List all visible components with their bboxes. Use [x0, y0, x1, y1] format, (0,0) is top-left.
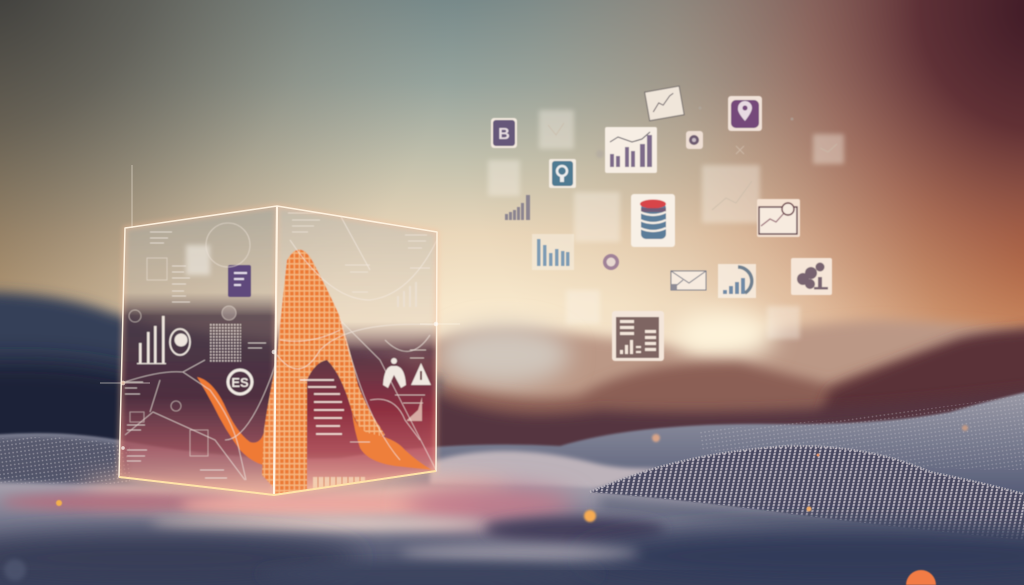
back band — [0, 388, 1024, 585]
people icon — [383, 358, 406, 388]
floating icons cluster — [488, 86, 844, 361]
icon: descending bar chart — [532, 234, 574, 270]
dot matrix — [209, 324, 241, 363]
icon: rising bars — [505, 195, 530, 220]
background: distant hills — [0, 292, 1024, 470]
small bar chart — [397, 282, 417, 307]
dotted rise at the seam — [262, 370, 274, 488]
blurred light tile — [186, 245, 210, 275]
icon: cloud and figure — [791, 258, 832, 295]
small text lines on left face — [125, 232, 266, 478]
icon: teal bulb — [549, 159, 576, 188]
panel: cube right face — [270, 206, 437, 495]
icon: dashboard card — [612, 311, 664, 361]
panel: cube left face — [119, 206, 280, 495]
orange wave — [197, 377, 272, 466]
cube glowing edges — [119, 206, 437, 495]
warning triangle icon — [411, 363, 431, 385]
circular badge: ES — [231, 375, 249, 390]
bar chart on left face — [137, 316, 166, 364]
icon: envelope — [671, 271, 706, 290]
line network — [277, 215, 437, 470]
orange ribbon — [352, 412, 432, 470]
faint blurred tiles — [488, 110, 844, 339]
icon: B badge: B — [498, 126, 510, 143]
data cube — [100, 165, 460, 495]
glow pools and shadows — [80, 474, 510, 506]
grid footer — [313, 477, 365, 489]
icon: trend chart with dial — [757, 199, 800, 237]
donut icon — [170, 329, 190, 355]
circular badge — [228, 370, 252, 394]
lower fabric body — [0, 482, 1024, 585]
faint specks — [596, 106, 794, 158]
icon: line chart card — [645, 86, 684, 121]
icon: signal gauge — [718, 264, 756, 298]
faint marks in blurred tiles — [548, 123, 837, 210]
icon: small purple ring — [603, 254, 619, 270]
foreground: woven fabric waves — [0, 388, 1024, 585]
icon: location pin — [728, 96, 762, 131]
glowing particles — [4, 425, 968, 585]
mini column chart — [407, 397, 422, 421]
edge sparkles — [100, 165, 460, 450]
pale wave right of the cube — [430, 451, 660, 492]
purple note icon — [228, 265, 251, 297]
text lines on right face — [300, 380, 344, 434]
ribbed crest — [590, 446, 1024, 540]
soft lower edge of the crest — [600, 504, 1024, 536]
orange dotted mountain chart — [270, 249, 385, 495]
icon: B badge — [491, 118, 517, 148]
icon: database cylinder — [631, 194, 675, 247]
icon: small round tile — [686, 131, 703, 149]
icon: combo bar chart card — [605, 127, 657, 173]
network lines — [122, 360, 277, 480]
